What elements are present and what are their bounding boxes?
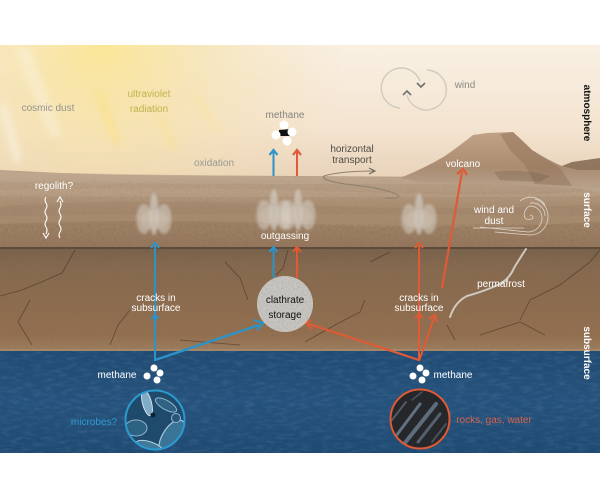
label: cracks left: subsurface	[132, 303, 181, 314]
arrows: blue methane path	[155, 152, 274, 361]
sun rays	[0, 48, 222, 162]
permafrost streak	[450, 249, 526, 317]
label: clathrate storage: clathrate	[266, 295, 305, 306]
panel: deep subsurface	[0, 351, 600, 453]
icon: wind and dust spiral	[473, 197, 548, 235]
volcano	[400, 132, 600, 192]
label: wind: wind	[454, 80, 475, 91]
label: regolith: regolith?	[35, 181, 74, 192]
icon: methane molecule right	[410, 364, 430, 384]
clathrate storage sphere	[257, 276, 313, 332]
label: ultraviolet radiation: radiation	[130, 104, 168, 115]
label: cracks right: cracks in	[399, 293, 439, 304]
label: cosmic dust: cosmic dust	[22, 103, 75, 114]
plume: left	[136, 193, 172, 235]
icon: microbes circle	[124, 390, 186, 450]
label: outgassing: outgassing	[261, 231, 309, 242]
label: cracks left: cracks in	[136, 293, 176, 304]
label: subsurface: subsurface	[581, 326, 592, 380]
label: oxidation: oxidation	[194, 158, 234, 169]
horizontal transport arrow	[323, 171, 399, 198]
label: wind and dust: wind and	[473, 205, 514, 216]
panel: atmosphere	[0, 45, 600, 180]
cracks	[0, 250, 600, 345]
label: microbes: microbes?	[71, 417, 117, 428]
label: rocks gas water: rocks, gas, water	[456, 415, 532, 426]
arrowhead: horizontal transport	[369, 168, 375, 174]
label: ultraviolet radiation: ultraviolet	[128, 89, 171, 100]
icon: wind	[381, 68, 446, 110]
panel: surface	[0, 170, 600, 249]
label: horizontal transport: horizontal	[330, 144, 374, 155]
label: methane atmosphere: methane	[266, 110, 305, 121]
label: permafrost: permafrost	[477, 279, 525, 290]
label: horizontal transport: transport	[332, 155, 372, 166]
label: wind and dust: dust	[485, 216, 504, 227]
label: cracks right: subsurface	[395, 303, 444, 314]
label: methane left: methane	[98, 370, 137, 381]
arrows: red methane path	[297, 152, 462, 361]
label: surface: surface	[581, 192, 592, 228]
plume: centre	[256, 189, 316, 231]
icon: regolith wavy arrows	[43, 197, 63, 238]
icon: methane molecule left	[144, 364, 164, 384]
panel: subsurface	[0, 249, 600, 351]
arrowheads: blue	[151, 150, 278, 330]
label: atmosphere: atmosphere	[581, 85, 592, 142]
label: clathrate storage: storage	[268, 310, 302, 321]
icon: methane molecule atmosphere	[272, 120, 296, 146]
arrowheads: red	[293, 150, 467, 329]
icon: rocks circle	[390, 390, 450, 448]
plume: right	[402, 193, 436, 235]
label: volcano: volcano	[446, 159, 481, 170]
label: methane right: methane	[434, 370, 473, 381]
